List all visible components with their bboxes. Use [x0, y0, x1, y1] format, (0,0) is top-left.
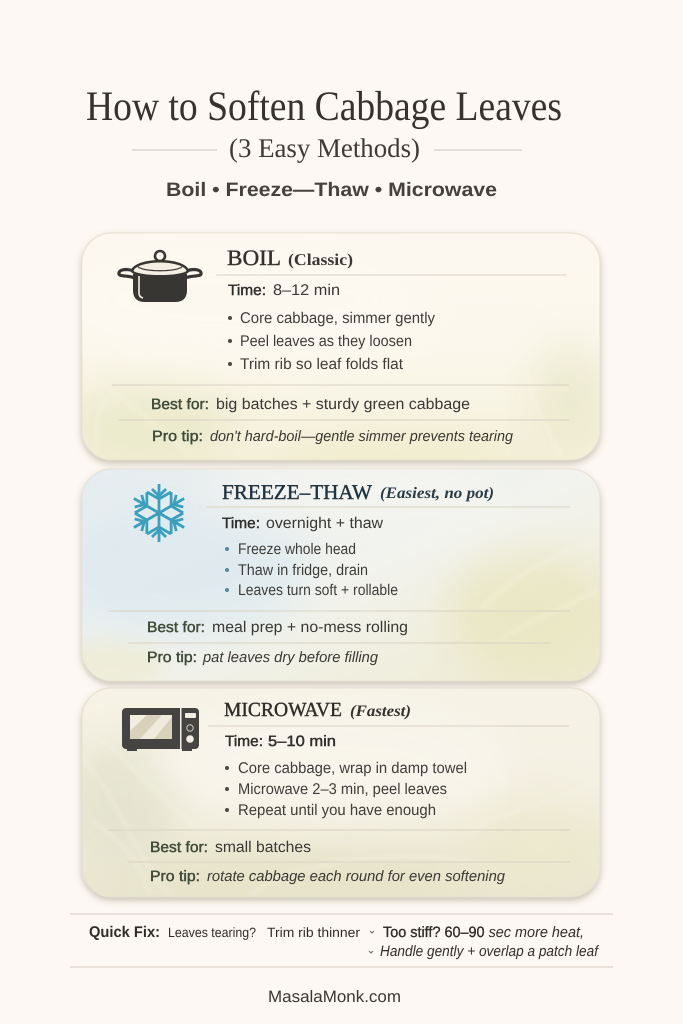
icon: microwave — [122, 708, 199, 751]
pro tip: boil: don't hard-boil—gentle simmer prevents tearing — [210, 428, 514, 445]
quick fix: Handle gently + overlap a patch leaf — [380, 943, 600, 960]
heading: microwave: (Fastest) — [350, 703, 411, 720]
best for: microwave: small batches — [215, 839, 311, 856]
quick fix: Trim rib thinner — [267, 925, 361, 940]
bullet list: boil: Core cabbage, simmer gently — [240, 310, 435, 327]
quick fix: Leaves tearing? — [168, 925, 256, 940]
heading: microwave — [224, 699, 411, 721]
title: How to Soften Cabbage Leaves — [86, 84, 562, 130]
bullet list: freeze-thaw — [225, 541, 398, 599]
time: boil: 8–12 min — [273, 282, 340, 299]
quick fix — [89, 924, 600, 960]
subtitle with side rules: (3 Easy Methods) — [229, 133, 420, 163]
time: microwave — [225, 733, 336, 750]
bullet list: freeze-thaw: Leaves turn soft + rollable — [238, 582, 398, 599]
pro tip: microwave: Pro tip: — [150, 868, 200, 885]
heading: boil: (Classic) — [288, 250, 353, 269]
heading: boil — [227, 245, 353, 270]
pro tip: freeze-thaw: Pro tip: — [147, 649, 197, 666]
time: boil — [228, 282, 340, 299]
heading: freeze-thaw: (Easiest, no pot) — [380, 485, 494, 502]
heading: freeze-thaw — [222, 480, 494, 504]
bullet list: boil: Trim rib so leaf folds flat — [240, 356, 404, 373]
bullet list: boil — [228, 310, 435, 373]
methods summary line: Boil • Freeze—Thaw • Microwave — [166, 179, 497, 201]
panel: boil — [50, 233, 605, 477]
pro tip: freeze-thaw: pat leaves dry before filling — [202, 649, 379, 666]
pro tip: boil: Pro tip: — [152, 428, 203, 445]
time: microwave: Time: — [225, 733, 263, 750]
best for: freeze-thaw: Best for: — [147, 619, 205, 636]
time: freeze-thaw: Time: — [222, 515, 260, 532]
time: boil: Time: — [228, 282, 266, 299]
best for: microwave: Best for: — [150, 839, 208, 856]
time: microwave: 5–10 min — [268, 733, 336, 750]
bullet list: microwave: Core cabbage, wrap in damp towel — [238, 760, 467, 777]
bullet list: boil: Peel leaves as they loosen — [240, 333, 412, 350]
panel: freeze-thaw — [78, 468, 604, 688]
bullet list: freeze-thaw: Thaw in fridge, drain — [238, 562, 368, 579]
icon: cooking pot — [119, 251, 201, 302]
best for: microwave — [150, 839, 311, 856]
quick fix: Quick Fix: — [89, 924, 160, 941]
quick fix: Too stiff? 60–90 sec more heat, — [383, 924, 584, 941]
footer: site name: MasalaMonk.com — [268, 988, 401, 1006]
best for: boil: Best for: — [151, 396, 209, 413]
heading: microwave: MICROWAVE — [224, 699, 342, 721]
bullet list: microwave: Microwave 2–3 min, peel leaves — [238, 781, 447, 798]
bullet list: microwave: Repeat until you have enough — [238, 802, 436, 819]
best for: boil: big batches + sturdy green cabbage — [216, 396, 470, 413]
time: freeze-thaw: overnight + thaw — [266, 515, 384, 532]
best for: freeze-thaw: meal prep + no-mess rolling — [212, 619, 408, 636]
heading: freeze-thaw: FREEZE–THAW — [222, 480, 372, 504]
panel: microwave — [60, 688, 610, 897]
bullet list: microwave — [225, 760, 467, 819]
pro tip: microwave: rotate cabbage each round for even softening — [207, 868, 506, 885]
bullet list: freeze-thaw: Freeze whole head — [238, 541, 356, 558]
heading: boil: BOIL — [227, 245, 281, 270]
icon: snowflake — [128, 484, 190, 542]
